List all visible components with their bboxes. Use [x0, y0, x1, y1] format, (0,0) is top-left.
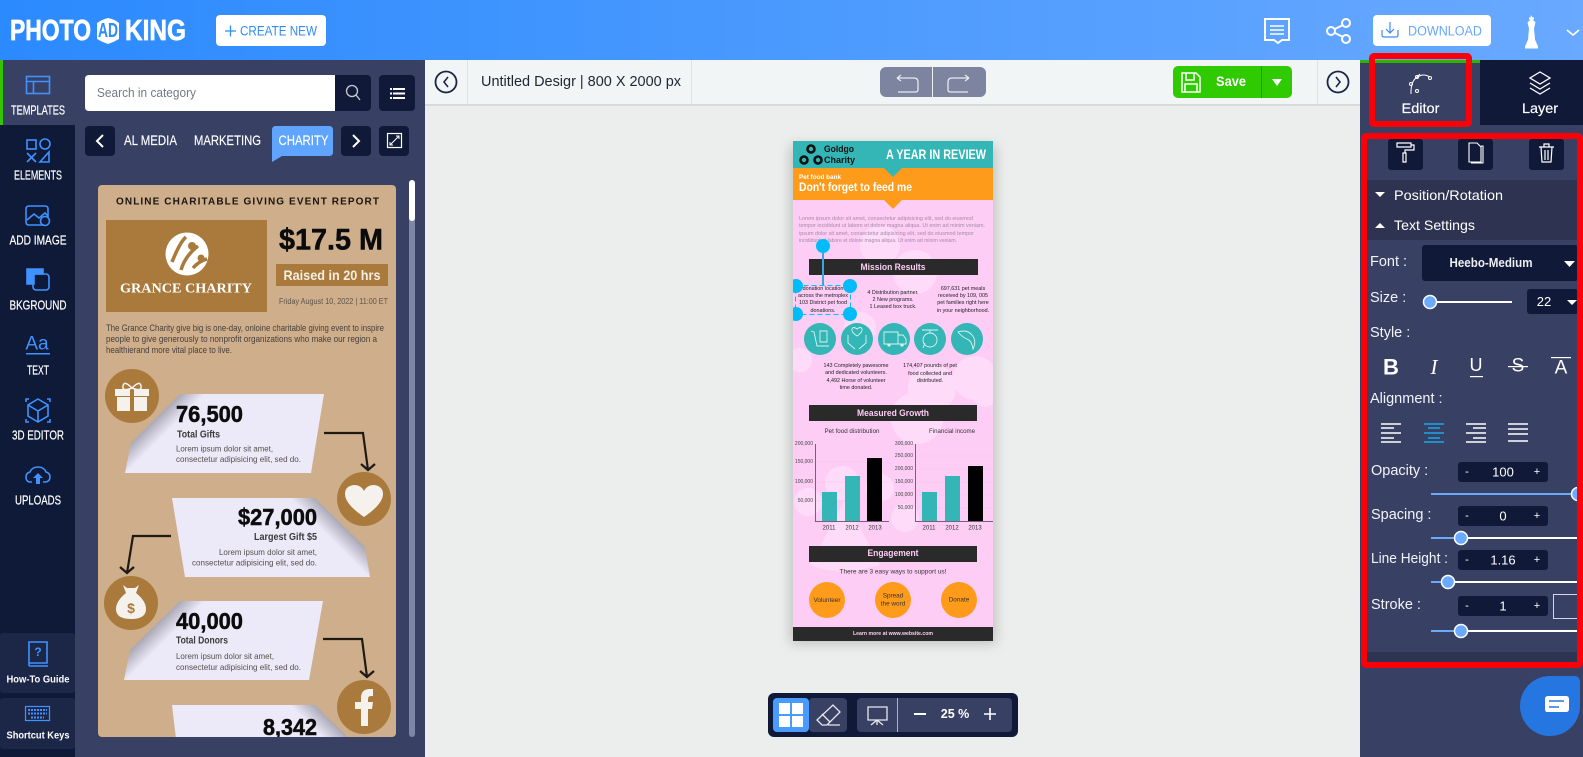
mission text: column 2: 4 Distribution partner.: [867, 290, 919, 296]
style control: I: [1430, 355, 1438, 379]
how-to guide button: [0, 633, 75, 693]
layer tab: Layer: [1522, 100, 1558, 116]
font control: Heebo-Medium: [1450, 256, 1532, 270]
icon: delivery van: [878, 323, 910, 355]
intro paragraph: [106, 323, 384, 355]
orange banner: Don't forget to feed me: [799, 182, 912, 194]
icon: facebook: [337, 680, 391, 734]
stroke control: 1: [1499, 598, 1507, 614]
card title: ONLINE CHARITABLE GIVING EVENT REPORT: [116, 196, 379, 208]
stat card: total gifts: 76,500: [176, 401, 243, 427]
alignment control: [1370, 391, 1528, 442]
bar chart: pet food distribution: Pet food distribution: [824, 429, 880, 435]
section bar: measured growth: Measured Growth: [857, 408, 929, 418]
orange banner: Pet food bank: [799, 174, 841, 181]
search box: [85, 75, 371, 111]
intro paragraph: people to give generously to nonprofit organizations who make our region a: [106, 334, 377, 344]
stroke control: [1371, 594, 1583, 638]
intro paragraph: The Grance Charity give big is one-day, onloine charitable giving event to inspire: [106, 323, 384, 333]
opacity control: Opacity :: [1371, 463, 1428, 479]
opacity control: -: [1465, 466, 1469, 478]
category tabs: CHARITY: [278, 132, 329, 148]
bar chart: financial income: [895, 429, 993, 532]
mission text: column 3: pet families right here: [937, 300, 989, 306]
design document: pet food infographic: [788, 141, 997, 641]
spacing control: [1371, 506, 1578, 544]
bar chart: financial income: 250,000: [895, 453, 913, 459]
volunteers text: and dedicated volunteers.: [825, 370, 887, 376]
rail item: elements: ELEMENTS: [14, 168, 62, 182]
rail item: text: TEXT: [27, 364, 49, 378]
spacing control: -: [1465, 510, 1469, 522]
canvas background: [425, 60, 1360, 757]
style control: U: [1470, 355, 1482, 375]
document shadow: [790, 145, 996, 644]
logo: KING: [125, 15, 186, 47]
bar chart: pet food distribution: 150,000: [795, 459, 813, 465]
line height control: [1371, 550, 1578, 588]
rail item: 3D editor: [12, 399, 64, 442]
icon: caring hands: [841, 323, 873, 355]
style control: A: [1555, 358, 1568, 378]
bar chart: financial income: 100,000: [895, 492, 913, 498]
stat card: largest gift: consectetur adipisicing elit, sed do.: [192, 558, 317, 568]
style control: S: [1512, 356, 1524, 376]
background blobs: [788, 225, 997, 571]
collapsible section headers: Position/Rotation: [1394, 187, 1503, 203]
brown logo box: GRANCE CHARITY: [120, 282, 252, 296]
footer band: [793, 627, 993, 641]
line height control: 1.16: [1490, 552, 1516, 568]
section bar: mission results: Mission Results: [860, 262, 926, 272]
lorem paragraph: incididunt ut labore et dolore magna aliqua. Ut enim ad minim veniam.: [799, 238, 957, 244]
create new button: CREATE NEW: [240, 24, 317, 38]
logo: [10, 15, 186, 47]
pounds of food text: 174,407 pounds of pet: [903, 363, 957, 369]
rail item: add image: ADD IMAGE: [10, 234, 66, 248]
bar chart: financial income: 150,000: [895, 479, 913, 485]
stat card: total donors: 40,000: [176, 608, 243, 634]
rail item: uploads: [15, 467, 61, 508]
bar chart: pet food distribution: 2011: [823, 526, 836, 532]
stat card: total gifts: Total Gifts: [177, 430, 220, 440]
stroke control: Stroke :: [1371, 597, 1421, 613]
circle: donate: Donate: [949, 596, 970, 604]
zoom controls: [857, 698, 1012, 732]
engagement subtitle: There are 3 easy ways to support us!: [840, 568, 947, 576]
grid toggle: [773, 698, 809, 732]
style control: Style :: [1370, 325, 1410, 341]
stat card: total donors: Total Donors: [176, 636, 228, 646]
rail item: templates: TEMPLATES: [11, 104, 65, 118]
mission text: column 3: [937, 286, 989, 314]
section bar: mission results: [809, 259, 978, 275]
undo redo buttons: [880, 67, 986, 97]
list view button: [379, 75, 415, 111]
brown logo box: [106, 220, 267, 312]
section bar: engagement: Engagement: [868, 548, 918, 558]
circle: spread the word: [875, 582, 911, 618]
bar chart: financial income: 200,000: [895, 466, 913, 472]
charity name: Charity: [824, 155, 855, 165]
circle: donate: [941, 582, 977, 618]
stroke control: -: [1465, 600, 1469, 612]
rail item: 3D editor: 3D EDITOR: [12, 428, 64, 442]
volunteers text: [823, 363, 889, 391]
font control: Font :: [1370, 254, 1407, 270]
pounds of food text: distributed.: [917, 378, 943, 384]
bar chart: pet food distribution: 2012: [845, 526, 859, 532]
rail item: uploads: UPLOADS: [15, 494, 61, 508]
circle: volunteer: Volunteer: [813, 597, 841, 604]
logo: AD: [98, 20, 118, 42]
line height control: Line Height :: [1371, 551, 1448, 567]
big stat: $17.5 M: [279, 224, 383, 256]
logo: PHOTO: [10, 15, 91, 47]
pounds of food text: food collected and: [908, 371, 952, 377]
stat card: total gifts: Lorem ipsum dolor sit amet,: [176, 444, 273, 454]
icon: chevron: [1567, 30, 1579, 35]
bar chart: financial income: 2011: [923, 526, 936, 532]
spacing control: Spacing :: [1371, 507, 1431, 523]
mission text: column 1: donations.: [811, 308, 835, 314]
opacity control: 100: [1492, 464, 1514, 480]
header band: [793, 141, 993, 168]
stroke control: +: [1534, 600, 1540, 612]
opacity control: +: [1534, 466, 1540, 478]
circle: volunteer: [809, 582, 845, 618]
how-to guide button: How-To Guide: [6, 674, 70, 686]
collapsed section strip: [1367, 652, 1578, 663]
scrollbar: [409, 180, 415, 737]
icon: scale: [914, 323, 946, 355]
stat card: largest gift: [172, 498, 370, 577]
bar chart: pet food distribution: 50,000: [798, 498, 813, 504]
charity name: [824, 144, 855, 165]
shortcut keys button: [0, 698, 75, 749]
category tabs: [85, 126, 409, 162]
red highlight: editor settings: [1364, 136, 1580, 665]
icon row: [804, 323, 983, 355]
date: Friday August 10, 2022 | 11:00 ET: [279, 297, 388, 306]
icon: share: [1327, 19, 1350, 43]
mission text: column 1: 103 District pet food: [799, 300, 847, 306]
download button: [1373, 15, 1491, 46]
icon: collapse left panel: [436, 72, 456, 92]
icon: chess king avatar: [1525, 15, 1538, 48]
shortcut keys button: Shortcut Keys: [6, 730, 70, 742]
spacing control: +: [1534, 510, 1540, 522]
rail item: text: [25, 334, 50, 378]
editor tab: Editor: [1402, 100, 1440, 116]
orange banner: [793, 168, 993, 209]
charity logo: [800, 146, 822, 164]
font control: [1370, 245, 1578, 281]
stat card: largest gift: $27,000: [238, 504, 317, 530]
stat card: total gifts: consectetur adipisicing elit, sed do.: [176, 454, 301, 464]
icon: collapse right panel: [1328, 72, 1348, 92]
stat card: followers: 8,342: [263, 714, 317, 740]
lorem paragraph: ipsum dolor sit amet, consectetur adipisicing elit, sed do eiusmod tempor: [799, 231, 974, 237]
bar chart: financial income: 2013: [968, 526, 982, 532]
bar chart: pet food distribution: 2013: [868, 526, 882, 532]
template side panel: [75, 60, 425, 757]
red highlight: editor tab: [1372, 56, 1469, 124]
rail item: background: BKGROUND: [10, 298, 66, 312]
lorem paragraph: Lorem ipsum dolor sit amet, consectetur adipisicing elit, sed do eiusmod: [799, 216, 973, 222]
lorem paragraph: [799, 216, 985, 244]
size control: 22: [1537, 294, 1551, 309]
zoom controls: 25 %: [941, 707, 969, 721]
bar chart: financial income: 50,000: [898, 505, 913, 511]
bar chart: financial income: 300,000: [895, 441, 913, 447]
mission text: column 1: [798, 286, 848, 314]
left icon rail: [0, 60, 75, 757]
rail item: text: Aa: [25, 334, 49, 354]
section bar: measured growth: [809, 405, 977, 421]
category tabs: MARKETING: [194, 132, 261, 148]
raised badge: Raised in 20 hrs: [284, 267, 381, 283]
intro paragraph: healthierand more vital place to live.: [106, 345, 232, 355]
volunteers text: 143 Completely pawesome: [823, 363, 889, 369]
style control: B: [1383, 354, 1399, 380]
rail item: templates: [11, 76, 65, 118]
raised badge: [276, 264, 388, 286]
mission text: column 3: 697,631 pet meals: [941, 286, 985, 292]
save button: Save: [1216, 73, 1246, 89]
circle: spread the word: the word: [881, 600, 906, 608]
stat card: largest gift: Lorem ipsum dolor sit amet,: [219, 547, 317, 557]
size control: [1370, 289, 1578, 314]
stat card: total donors: [124, 601, 323, 680]
icon: money bag: $: [127, 600, 135, 616]
header bar: [0, 0, 1583, 60]
icon: comments: [1265, 19, 1289, 43]
alignment control: Alignment :: [1370, 391, 1443, 407]
mission text: column 1: donation location: [803, 286, 843, 292]
stat card: largest gift: Largest Gift $5: [254, 532, 317, 543]
line height control: -: [1465, 554, 1469, 566]
footer band: Learn more at www.website.com: [853, 631, 933, 637]
lorem paragraph: tempor incididunt ut labore et dolore magna aliqua. Ut enim ad minim veniam.: [799, 223, 985, 229]
rail item: background: [10, 269, 66, 312]
chat bubble: [1520, 676, 1580, 736]
collapsible section headers: Text Settings: [1394, 217, 1475, 233]
search box: Search in category: [97, 86, 197, 100]
icon: heart: [337, 472, 391, 526]
opacity control: [1371, 462, 1583, 500]
mission text: column 2: [868, 290, 918, 308]
bar chart: financial income: Financial income: [929, 429, 976, 435]
top toolbar: [425, 60, 1360, 106]
icon: fish: [951, 323, 983, 355]
mission text: column 2: 1 Leased box truck.: [869, 304, 917, 310]
arrow: largest gift to money bag: [120, 536, 171, 573]
rail item: add image: [10, 206, 66, 248]
eraser toggle: [809, 698, 847, 732]
icon: hand truck: [804, 323, 836, 355]
stat card: total donors: consectetur adipisicing elit, sed do.: [176, 662, 301, 672]
circle: spread the word: Spread: [883, 592, 904, 600]
mission text: column 1: across the metroplex: [798, 293, 848, 299]
document title: Untitled Desigr | 800 X 2000 px: [481, 74, 682, 90]
style control: [1370, 325, 1571, 380]
pounds of food text: [904, 363, 957, 382]
mission text: column 3: in your neighborhood.: [937, 308, 989, 314]
how-to guide button: ?: [34, 645, 42, 659]
volunteers text: time donated.: [840, 385, 872, 391]
tool buttons: [1388, 139, 1564, 170]
size control: Size :: [1370, 290, 1406, 306]
stat card: total gifts: [105, 369, 324, 473]
bar chart: pet food distribution: 100,000: [795, 479, 813, 485]
charity name: Goldgo: [824, 144, 854, 154]
volunteers text: 4,492 Horse of volunteer: [826, 378, 886, 384]
mission text: column 2: 2 New programs.: [872, 297, 914, 303]
layer tab: [1480, 60, 1583, 125]
bar chart: financial income: 2012: [945, 526, 959, 532]
document heading: A YEAR IN REVIEW: [886, 146, 987, 162]
zoom toolbar: [768, 693, 1018, 737]
create new button: [216, 15, 326, 46]
save button: [1173, 66, 1292, 98]
mission text: column 3: received by 109, 005: [938, 293, 988, 299]
section bar: engagement: [809, 546, 977, 562]
icon: money bag: [104, 576, 158, 630]
rail item: elements: [14, 139, 62, 182]
category tabs: AL MEDIA: [124, 132, 178, 148]
collapsible section headers: [1367, 180, 1578, 240]
template card: charity report: [98, 185, 396, 757]
arrow: donors to facebook: [323, 639, 374, 677]
spacing control: 0: [1499, 508, 1507, 524]
text selection handles: [789, 239, 857, 321]
download button: DOWNLOAD: [1408, 24, 1482, 38]
right properties panel: [1360, 60, 1583, 757]
editor tab: [1360, 60, 1480, 116]
bar chart: pet food distribution: 200,000: [795, 441, 813, 447]
line height control: +: [1534, 554, 1540, 566]
stat card: followers: [172, 705, 348, 737]
stat card: total donors: Lorem ipsum dolor sit amet,: [176, 651, 274, 661]
bar chart: pet food distribution: [795, 429, 889, 532]
arrow: gifts to heart: [324, 433, 375, 470]
